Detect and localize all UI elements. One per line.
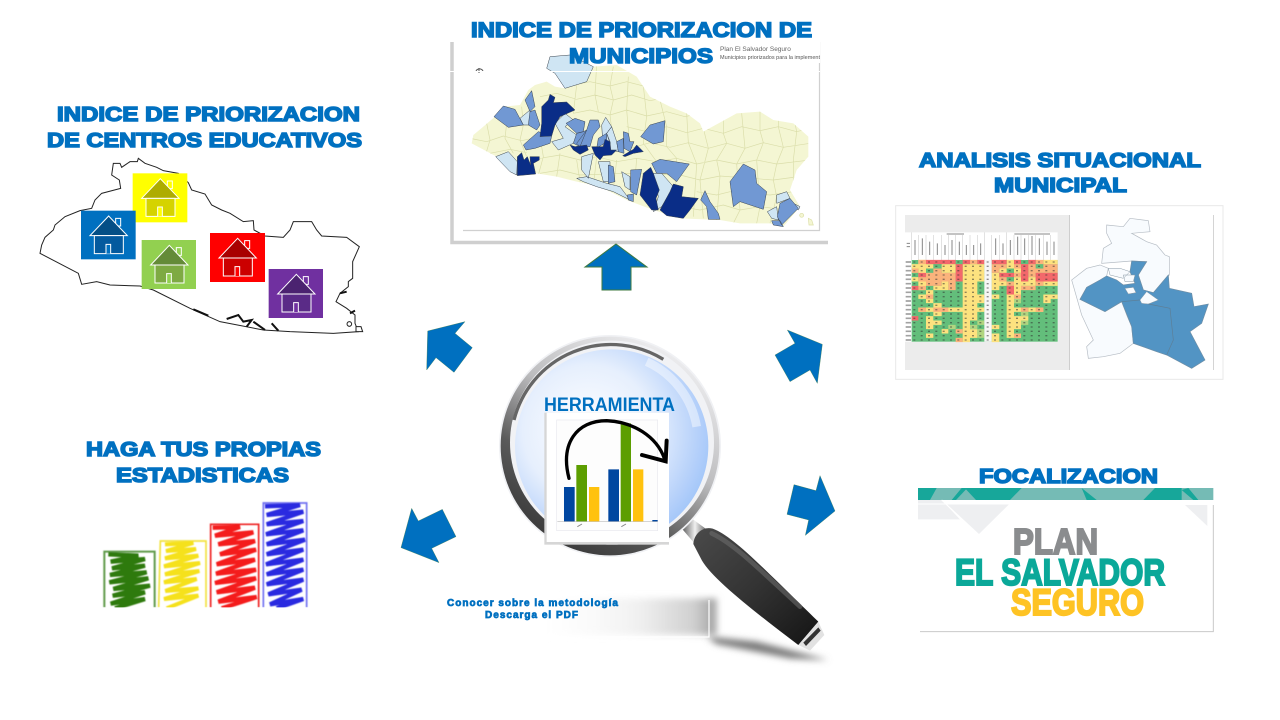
heading: indice de priorizacion de centros educativos: INDICE DE PRIORIZACION bbox=[57, 103, 360, 126]
heading: indice de priorizacion de municipios: INDICE DE PRIORIZACION DE bbox=[471, 19, 812, 42]
chart card: tool bar chart bbox=[544, 413, 669, 545]
west white municipalities bbox=[1072, 265, 1133, 358]
panel: municipal prioritization map bbox=[450, 42, 828, 242]
logo text: el salvador: EL SALVADOR bbox=[955, 552, 1165, 593]
department map bbox=[1072, 218, 1208, 368]
link box outline bbox=[522, 600, 709, 637]
white separator line bbox=[450, 70, 820, 72]
icon: purple house bbox=[269, 269, 323, 318]
dark blue municipalities bbox=[517, 94, 698, 218]
chart: hand-drawn bars bbox=[104, 503, 307, 608]
yellow bar bbox=[159, 541, 206, 608]
panel: school map with house icons bbox=[40, 158, 363, 333]
heading: analisis situacional municipal: ANALISIS SITUACIONAL bbox=[919, 149, 1201, 172]
medium blue municipalities bbox=[494, 91, 798, 227]
link text: methodology pdf: Descarga el PDF bbox=[485, 610, 579, 621]
red bar bbox=[211, 524, 259, 608]
highlighted blue municipalities bbox=[1080, 261, 1208, 368]
arrow: up to municipalities bbox=[585, 244, 647, 290]
arrow: up-left to schools bbox=[427, 322, 472, 372]
label: herramienta: HERRAMIENTA bbox=[544, 395, 675, 416]
light blue municipalities bbox=[496, 55, 800, 220]
arrow: up-right to situational analysis bbox=[775, 330, 822, 383]
arrow: down-right to targeting bbox=[787, 476, 835, 535]
choropleth map of municipalities bbox=[470, 55, 813, 227]
heading: indice de priorizacion de municipios: MUNICIPIOS bbox=[569, 45, 713, 68]
north white municipalities bbox=[1102, 218, 1169, 293]
icon: red house bbox=[210, 233, 265, 282]
glass lens bbox=[515, 349, 708, 543]
green bar bbox=[104, 552, 155, 608]
blue bar bbox=[263, 503, 307, 608]
heading: focalizacion: FOCALIZACION bbox=[979, 465, 1158, 488]
curved arrow bbox=[567, 421, 667, 478]
icon: blue house bbox=[81, 211, 136, 259]
heading: haga tus propias estadisticas: ESTADISTICAS bbox=[116, 464, 289, 487]
arrow: down-left to statistics bbox=[401, 508, 456, 563]
heat map table bbox=[905, 215, 1213, 370]
coastal islands bbox=[193, 292, 355, 331]
link text: methodology pdf: Conocer sobre la metodología bbox=[447, 598, 619, 609]
handle bbox=[682, 518, 824, 651]
metal rim bbox=[499, 335, 721, 557]
panel: municipal situational analysis bbox=[896, 206, 1223, 379]
map legend box: Municipios priorizados para la implement bbox=[720, 55, 820, 61]
logo text: plan: PLAN bbox=[1013, 521, 1098, 562]
panel frame bbox=[896, 206, 1223, 379]
map frame bbox=[452, 42, 828, 242]
banner band bbox=[918, 488, 1213, 632]
icon: magnifying glass bbox=[499, 335, 828, 660]
map legend box bbox=[717, 42, 820, 63]
heading: haga tus propias estadisticas: HAGA TUS PROPIAS bbox=[86, 438, 321, 461]
map legend box: Plan El Salvador Seguro bbox=[720, 46, 791, 53]
panel: plan el salvador seguro logo bbox=[918, 488, 1213, 632]
icon: yellow house bbox=[133, 173, 187, 222]
logo text: seguro: SEGURO bbox=[1011, 582, 1144, 623]
map orientation mark bbox=[476, 68, 483, 73]
country outline bbox=[40, 158, 359, 333]
icon: green house bbox=[142, 240, 196, 289]
heading: indice de priorizacion de centros educativos: DE CENTROS EDUCATIVOS bbox=[47, 129, 362, 152]
heading: analisis situacional municipal: MUNICIPAL bbox=[994, 174, 1127, 197]
lens shadow on floor bbox=[523, 598, 828, 660]
